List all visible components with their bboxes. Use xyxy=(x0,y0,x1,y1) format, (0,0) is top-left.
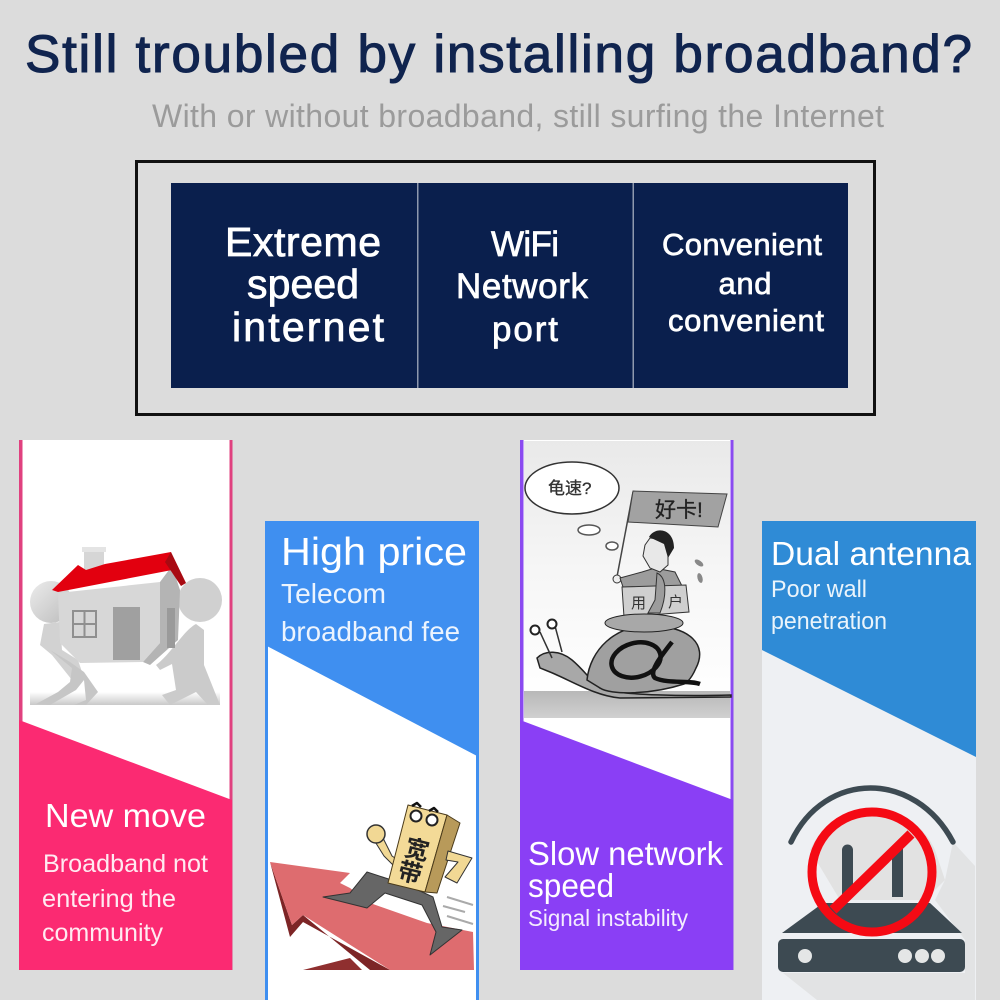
text: broadband not entering the community: community xyxy=(42,919,163,947)
label: new move: New move xyxy=(45,797,206,834)
text: broadband not entering the community: entering the xyxy=(42,885,176,913)
flag xyxy=(616,491,727,582)
house xyxy=(58,582,160,663)
panel: slow network speed xyxy=(520,440,734,970)
text: telecom broadband fee: broadband fee xyxy=(281,616,460,647)
speech bubble: 龟速? xyxy=(548,479,591,498)
illustration: people carrying house xyxy=(30,547,222,705)
user xyxy=(613,530,705,617)
feature: wifi network port: WiFi xyxy=(491,225,559,264)
text: signal instability: Signal instability xyxy=(528,905,688,931)
feature: convenient: Convenient xyxy=(662,227,822,262)
flag: 好卡! xyxy=(655,499,703,522)
subtitle: With or without broadband, still surfing the Internet xyxy=(152,98,884,134)
feature: extreme speed internet: speed xyxy=(247,261,359,307)
panel: dual antenna xyxy=(762,521,976,1000)
feature: wifi network port: Network xyxy=(456,267,588,306)
speech bubble xyxy=(525,462,619,550)
illustration: building running up arrow xyxy=(270,803,474,970)
feature: wifi network port xyxy=(456,225,588,349)
illustration: building running up arrow: 宽 xyxy=(402,834,432,866)
panel: new move xyxy=(19,440,232,970)
icon: crossed-out router xyxy=(778,788,975,1000)
feature: extreme speed internet: internet xyxy=(232,304,385,350)
panel: feature banner xyxy=(136,162,874,414)
text: telecom broadband fee xyxy=(281,578,460,647)
feature: convenient: convenient xyxy=(668,303,824,338)
text: broadband not entering the community: Broadband not xyxy=(43,850,208,878)
user: 户 xyxy=(668,594,683,611)
text: telecom broadband fee: Telecom xyxy=(281,578,386,609)
illustration: building running up arrow: 带 xyxy=(395,857,425,889)
label: dual antenna: Dual antenna xyxy=(771,535,972,572)
feature: extreme speed internet xyxy=(225,219,385,350)
label: high price: High price xyxy=(281,531,467,574)
feature: wifi network port: port xyxy=(492,310,558,349)
label: slow network speed xyxy=(528,835,723,904)
illustration: user on snail xyxy=(524,441,731,718)
feature: convenient xyxy=(662,227,824,338)
feature: extreme speed internet: Extreme xyxy=(225,219,381,265)
title: Still troubled by installing broadband? xyxy=(25,25,972,84)
text: poor wall penetration xyxy=(771,576,887,635)
user: 用 xyxy=(631,595,646,612)
label: slow network speed: Slow network xyxy=(528,835,723,872)
left person xyxy=(30,581,72,623)
feature: convenient: and xyxy=(718,266,772,301)
label: slow network speed: speed xyxy=(528,867,614,904)
panel: high price xyxy=(265,521,479,1000)
text: poor wall penetration: penetration xyxy=(771,608,887,635)
right person xyxy=(178,578,222,622)
text: broadband not entering the community xyxy=(42,850,208,947)
text: poor wall penetration: Poor wall xyxy=(771,576,867,603)
snail xyxy=(530,614,731,698)
